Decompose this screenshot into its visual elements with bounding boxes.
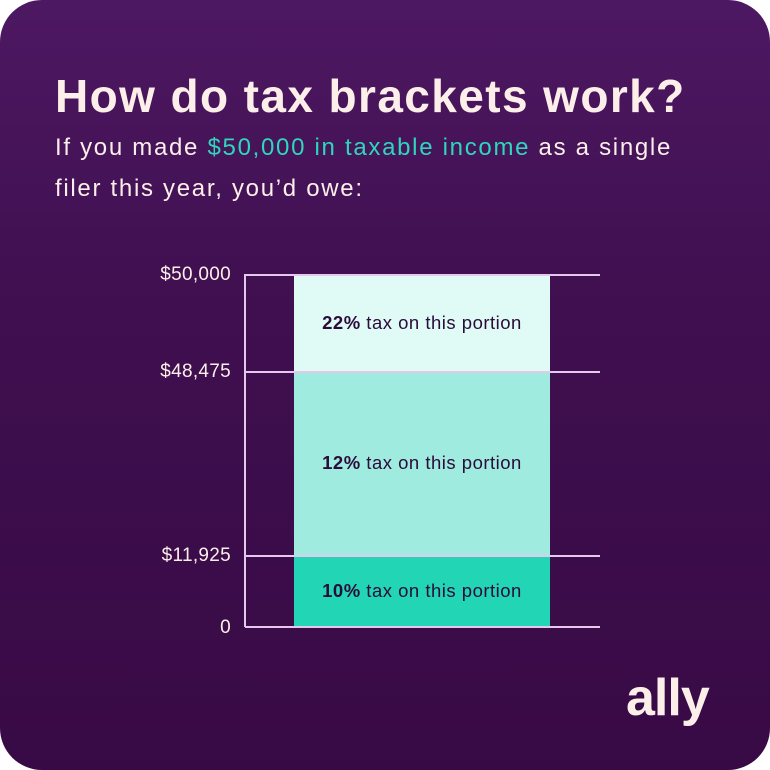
segment 22%: 22% tax on this portion <box>322 312 522 332</box>
segment 12% <box>294 371 550 555</box>
axis labels <box>160 264 231 638</box>
subtitle: If you made $50,000 in taxable income as a single <box>55 134 672 161</box>
subtitle: filer this year, you’d owe: <box>55 175 364 202</box>
chart: $48,475 <box>160 361 231 382</box>
logo: ally <box>626 669 709 727</box>
subtitle <box>55 134 672 202</box>
chart: $50,000 <box>160 264 231 285</box>
segment 10%: 10% tax on this portion <box>322 580 522 600</box>
segment 10% <box>294 555 550 626</box>
segment 12%: 12% tax on this portion <box>322 452 522 473</box>
chart: 0 <box>220 617 231 638</box>
title: How do tax brackets work? <box>55 70 686 122</box>
segment 22% <box>294 274 550 371</box>
chart: $11,925 <box>162 545 231 566</box>
